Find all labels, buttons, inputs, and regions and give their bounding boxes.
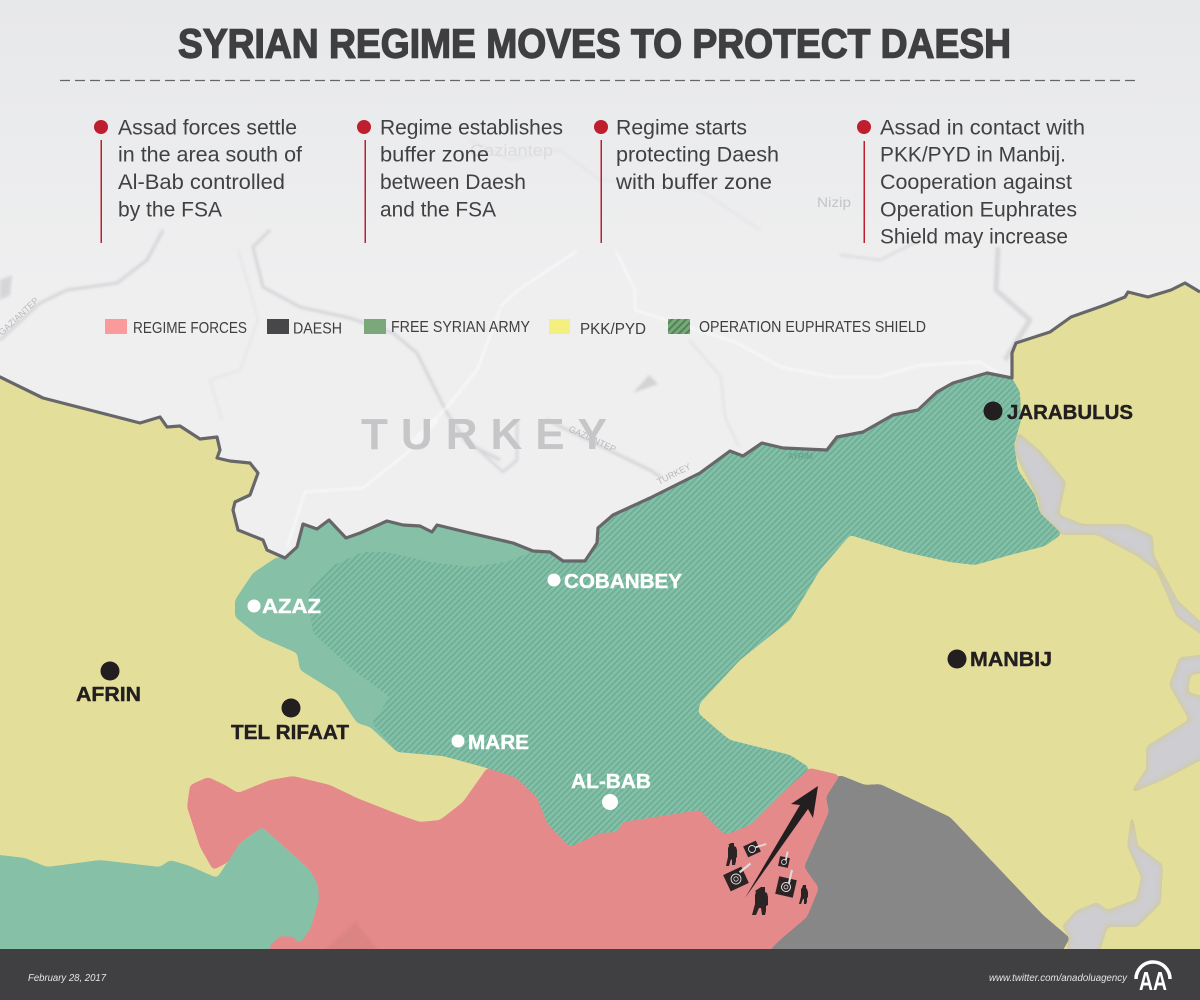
icon: tank large left [723,862,758,891]
city: Tel Rifaat: TEL RIFAAT [231,722,349,744]
text block: Regime establishes buffer zone: Regime establishes [380,116,563,140]
text block: Assad forces settle: Al-Bab controlled [118,171,285,194]
legend: Free Syrian Army: FREE SYRIAN ARMY [391,319,530,336]
text block: Assad in contact with PKK/PYD: Cooperation against [880,171,1072,194]
text block: Regime starts protecting Daesh: with buffer zone [615,171,772,194]
footer bar [0,949,1200,1000]
legend: regime forces: REGIME FORCES [133,320,247,337]
legend: Daesh: DAESH [293,320,342,338]
text block: Regime starts protecting Daesh: protecting Daesh [616,144,779,167]
city: Tel Rifaat [231,698,349,744]
arrow: regime advance [745,786,818,898]
territory: PKK/PYD [0,283,1200,990]
legend: Operation Euphrates Shield: OPERATION EUPHRATES SHIELD [699,319,926,336]
map label: Nizip: Nizip [817,194,851,210]
text block: Assad in contact with PKK/PYD: Assad in contact with [880,116,1085,140]
icon: tank large right [775,867,799,898]
darker relief on regime area [325,922,378,950]
text block: Assad in contact with PKK/PYD [857,116,1085,249]
text block: Assad forces settle: by the FSA [118,198,222,221]
river: Euphrates [1015,433,1200,970]
country label: Turkey: TURKEY [361,410,607,459]
icon: soldier center [752,887,768,915]
territory: Free Syrian Army southwest [0,827,340,990]
text block: Regime starts protecting Daesh: Regime starts [616,116,747,140]
text block: Assad in contact with PKK/PYD: PKK/PYD in Manbij. [880,144,1066,167]
text block: Regime establishes buffer zone: between Daesh [380,171,526,194]
icon: tank small right [778,850,791,868]
city: Manbij: MANBIJ [970,649,1052,671]
road label: Turkey: TURKEY [655,461,692,487]
text block: Assad forces settle [94,116,302,243]
text block: Assad forces settle: in the area south of [118,144,302,167]
text block: Assad in contact with PKK/PYD: Operation Euphrates [880,198,1077,221]
icon: soldier left [726,843,737,866]
territory: Operation Euphrates Shield hatch [300,365,1070,855]
road label: Gaziantep center: GAZIANTEP [567,424,618,454]
icon: Anadolu Agency logo [1136,962,1170,996]
text block: Assad in contact with PKK/PYD: Shield may increase [880,226,1068,249]
city: Afrin: AFRIN [76,684,141,706]
footer twitter address: www.twitter.com/anadoluagency [989,972,1128,984]
icon: military units [723,837,808,915]
text block: Regime establishes buffer zone: buffer zone [380,144,489,167]
border: Turkey-Syria [0,283,1200,561]
text block: Regime establishes buffer zone [357,116,563,243]
legend: Daesh [267,319,342,338]
city: Azaz: AZAZ [262,596,321,618]
title: SYRIAN REGIME MOVES TO PROTECT DAESH [178,20,1011,66]
text block: Regime starts protecting Daesh [594,116,779,243]
text block: Assad forces settle: Assad forces settle [118,116,297,140]
city: Al-Bab: AL-BAB [571,771,651,793]
footer date: February 28, 2017 [28,973,106,984]
city: Jarabulus: JARABULUS [1007,402,1133,424]
territory: Regime forces [187,768,840,990]
icon: tank small left [743,837,768,857]
city: Al-Bab [571,771,651,810]
road label: Ayrim: AYRIM [788,452,813,461]
map label: Gaziantep: Gaziantep [470,141,553,160]
legend: regime forces [105,319,247,337]
faint road network [0,140,1030,547]
territory: Free Syrian Army north [235,373,1062,847]
city: Mare: MARE [468,732,529,754]
territory: Daesh [760,775,1070,990]
icon: soldier right [799,885,808,904]
legend [105,319,926,338]
city: Afrin [76,662,141,706]
text block: Regime establishes buffer zone: and the FSA [380,198,496,221]
legend: PKK/PYD: PKK/PYD [580,321,646,338]
city: Cobanbey: COBANBEY [564,571,683,593]
legend: PKK/PYD [549,319,646,338]
icon: Anadolu Agency logo: AA [1139,966,1167,996]
